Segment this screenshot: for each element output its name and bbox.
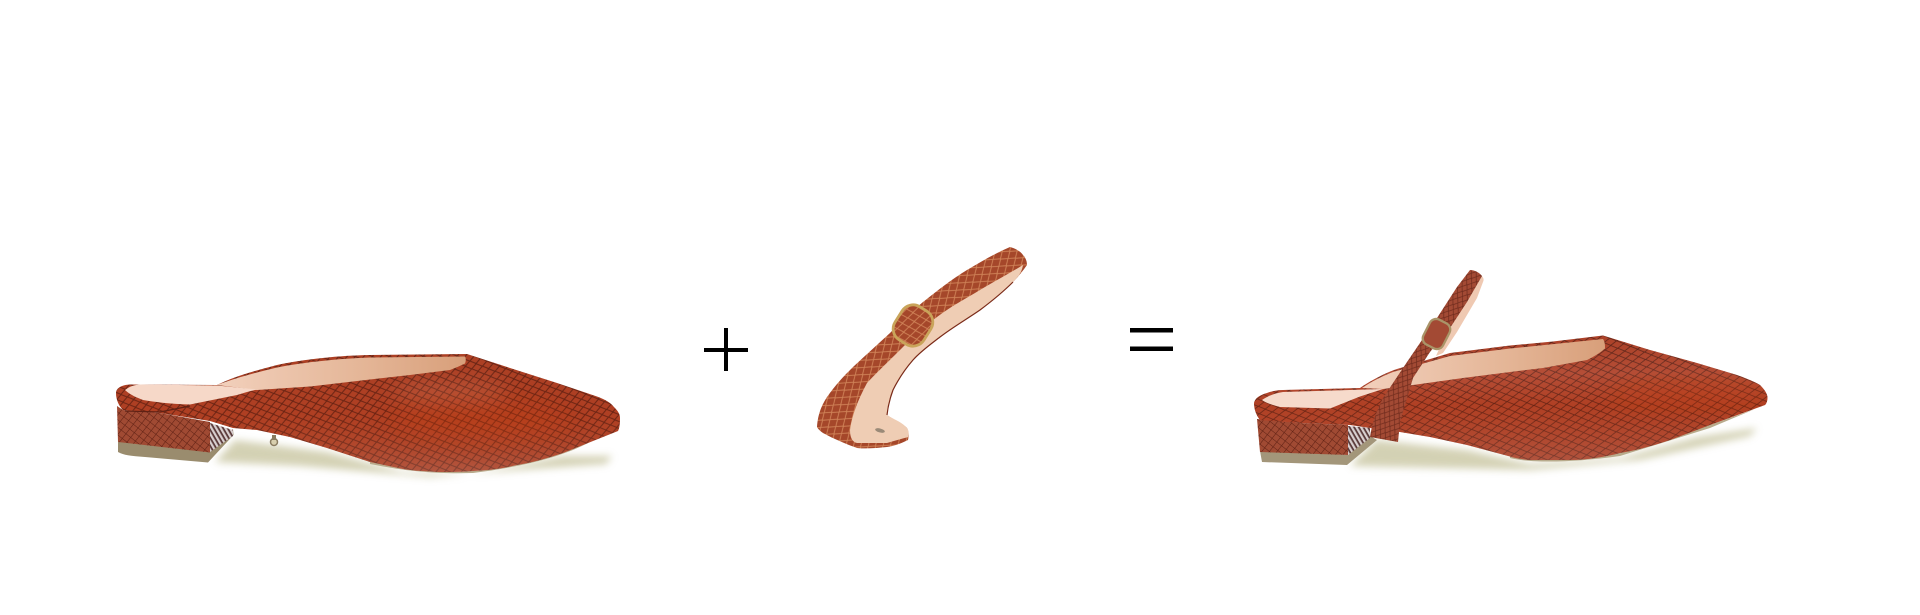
heel block xyxy=(1257,419,1348,455)
heel sole xyxy=(1260,436,1377,465)
equals sign xyxy=(1130,328,1173,351)
buckle xyxy=(888,300,938,351)
ground shadow xyxy=(1350,428,1757,470)
upper shading xyxy=(1250,335,1770,461)
shoe: backless mule xyxy=(110,354,625,477)
sole edge xyxy=(1510,409,1755,462)
inner lining xyxy=(217,356,466,390)
strap lining edge xyxy=(887,282,1013,415)
strap xyxy=(1370,270,1482,442)
inner lining xyxy=(1362,339,1605,389)
buckle xyxy=(1420,317,1453,351)
ground shadow xyxy=(215,440,612,477)
plus sign xyxy=(704,328,748,371)
lining rivet xyxy=(875,427,885,434)
heel block xyxy=(117,406,210,452)
heel side xyxy=(210,423,233,452)
infographic: shoe plus strap equals slingback xyxy=(116,247,1768,482)
heel crease xyxy=(125,406,190,412)
stud detail xyxy=(270,435,278,446)
footbed xyxy=(1262,389,1383,408)
heel sole xyxy=(118,429,234,462)
shoe: finished slingback xyxy=(1250,270,1770,470)
upper xyxy=(1254,336,1768,460)
strap lining xyxy=(1436,275,1484,356)
upper xyxy=(116,354,620,472)
upper shading xyxy=(116,368,620,472)
footbed xyxy=(125,384,257,404)
sole edge xyxy=(370,442,590,473)
strap xyxy=(817,247,1027,448)
strap lining xyxy=(850,265,1023,443)
heel side xyxy=(1348,426,1370,455)
strap outer scales xyxy=(817,247,1027,448)
